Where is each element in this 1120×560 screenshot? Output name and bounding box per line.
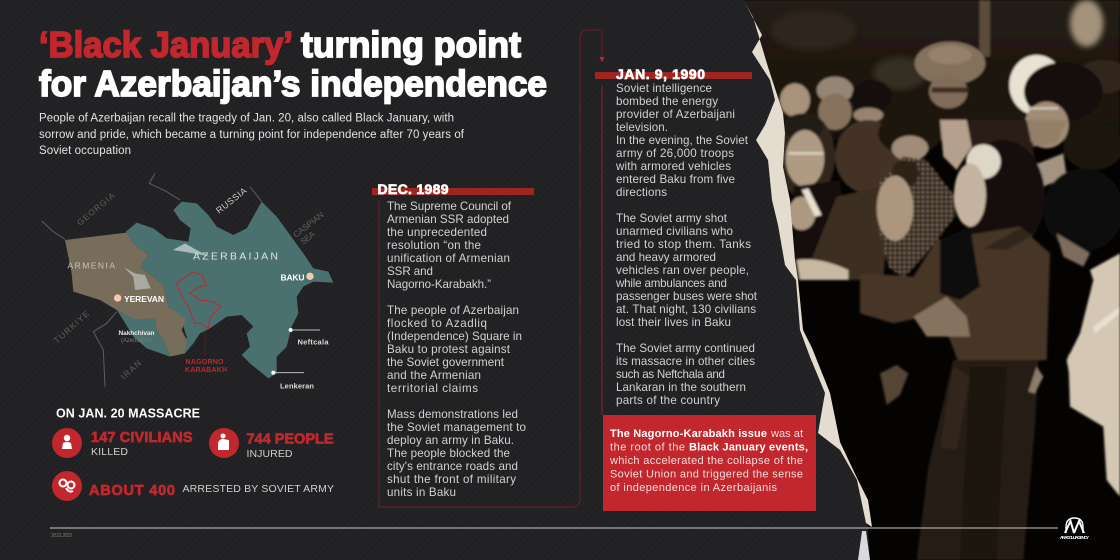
callout: Nagorno-Karabakh issue: of independence in Azerbaijanis bbox=[610, 482, 778, 494]
section: Jan. 9, 1990: unarmed civilians who bbox=[616, 225, 733, 238]
section: Jan. 9, 1990: provider of Azerbaijani bbox=[616, 108, 735, 121]
section: Jan. 9, 1990: vehicles ran over people, bbox=[616, 264, 749, 277]
section: Dec. 1989: units in Baku bbox=[387, 486, 456, 499]
section: Jan. 9, 1990: In the evening, the Soviet bbox=[616, 134, 749, 147]
section: Dec. 1989: and the Armenian bbox=[387, 369, 481, 382]
title: turning point bbox=[301, 24, 521, 65]
section: Dec. 1989: the Soviet management to bbox=[387, 421, 526, 434]
torn paper edge bbox=[745, 3, 872, 560]
section: Jan. 9, 1990: with armored vehicles bbox=[615, 160, 731, 173]
map of Azerbaijan and Armenia: BAKU bbox=[280, 272, 304, 282]
date: 20.01.2023 bbox=[51, 533, 72, 539]
stat: about 400 arrested bbox=[52, 471, 334, 501]
section: Dec. 1989: city's entrance roads and bbox=[387, 460, 518, 473]
map of Azerbaijan and Armenia: ARMENIA bbox=[68, 260, 115, 270]
title: for Azerbaijan’s independence bbox=[39, 63, 547, 104]
section: Jan. 9, 1990: JAN. 9, 1990 bbox=[616, 66, 705, 82]
map of Azerbaijan and Armenia: KARABAKH bbox=[185, 367, 227, 374]
section: Dec. 1989: DEC. 1989 bbox=[378, 181, 449, 197]
intro text: sorrow and pride, which became a turning point for independence after 70 years of bbox=[39, 129, 465, 141]
intro text: Soviet occupation bbox=[39, 145, 131, 157]
section: Dec. 1989: Nagorno-Karabakh.” bbox=[387, 278, 491, 291]
map of Azerbaijan and Armenia: (Azerbaijan) bbox=[121, 338, 152, 344]
section: Dec. 1989: flocked to Azadliq bbox=[387, 317, 487, 330]
section: Dec. 1989: unification of Armenian bbox=[387, 252, 510, 265]
section: Jan. 9, 1990: The Soviet army continued bbox=[616, 342, 755, 355]
callout: Nagorno-Karabakh issue: Black January events, bbox=[689, 442, 808, 454]
timeline connector arrow bbox=[379, 30, 604, 507]
section: Jan. 9, 1990: passenger buses were shot bbox=[616, 290, 758, 303]
map of Azerbaijan and Armenia: GEORGIA bbox=[75, 190, 117, 228]
section: Jan. 9, 1990: Soviet intelligence bbox=[616, 82, 712, 95]
photo: mourners in Baku bbox=[740, 0, 1120, 560]
section: Jan. 9, 1990: The Soviet army shot bbox=[616, 212, 728, 225]
section: Dec. 1989: (Independence) Square in bbox=[387, 330, 522, 343]
callout: Nagorno-Karabakh issue: Soviet Union and triggered the sense bbox=[610, 468, 803, 480]
section: Dec. 1989: The people blocked the bbox=[387, 447, 510, 460]
section: Dec. 1989: the Soviet government bbox=[387, 356, 505, 369]
section: Jan. 9, 1990: at. That night, 130 civilians bbox=[616, 303, 756, 316]
map of Azerbaijan and Armenia: SEA bbox=[298, 229, 317, 247]
logo: Anadolu Agency: ANADOLU AGENCY bbox=[1060, 535, 1089, 540]
map of Azerbaijan and Armenia: NAGORNO bbox=[186, 359, 224, 366]
section: Jan. 9, 1990: such as Neftchala and bbox=[616, 368, 725, 381]
section: Dec. 1989: Baku to protest against bbox=[387, 343, 511, 356]
section: Dec. 1989 bbox=[372, 181, 534, 499]
section: Jan. 9, 1990 bbox=[595, 66, 758, 407]
map of Azerbaijan and Armenia bbox=[42, 173, 333, 390]
section: Dec. 1989: The people of Azerbaijan bbox=[387, 304, 519, 317]
map of Azerbaijan and Armenia: RUSSIA bbox=[214, 186, 249, 216]
section: Dec. 1989: Mass demonstrations led bbox=[387, 408, 518, 421]
section: Jan. 9, 1990: directions bbox=[616, 186, 667, 199]
stat: 744 people injured: INJURED bbox=[246, 448, 293, 460]
stat: 147 civilians killed: KILLED bbox=[91, 446, 128, 458]
section: Dec. 1989: Armenian SSR adopted bbox=[387, 213, 509, 226]
stat: 744 people injured bbox=[209, 428, 334, 460]
stat: about 400 arrested: ABOUT 400 bbox=[89, 483, 175, 499]
icon: person bbox=[62, 435, 72, 449]
map of Azerbaijan and Armenia: Lenkeran bbox=[280, 382, 314, 390]
map of Azerbaijan and Armenia: TURKIYE bbox=[52, 308, 91, 345]
section: Dec. 1989: territorial claims bbox=[387, 382, 478, 395]
callout: Nagorno-Karabakh issue bbox=[603, 415, 816, 511]
section: Dec. 1989: SSR and bbox=[387, 265, 433, 278]
map of Azerbaijan and Armenia: Nakhchivan bbox=[118, 330, 155, 337]
map of Azerbaijan and Armenia: YEREVAN bbox=[124, 294, 164, 304]
map of Azerbaijan and Armenia: AZERBAIJAN bbox=[193, 250, 278, 262]
map of Azerbaijan and Armenia: IRAN bbox=[119, 358, 143, 381]
stat: 147 civilians killed: 147 CIVILIANS bbox=[91, 430, 193, 446]
section: Jan. 9, 1990: and heavy armored bbox=[616, 251, 716, 264]
stats heading: ON JAN. 20 MASSACRE bbox=[56, 406, 200, 420]
section: Jan. 9, 1990: Lankaran in the southern bbox=[616, 381, 746, 394]
section: Jan. 9, 1990: entered Baku from five bbox=[616, 173, 735, 186]
section: Jan. 9, 1990: lost their lives in Baku bbox=[616, 316, 731, 329]
title: ‘Black January’ bbox=[39, 24, 293, 65]
map of Azerbaijan and Armenia: CASPIAN bbox=[291, 210, 326, 240]
section: Jan. 9, 1990: while ambulances and bbox=[615, 277, 727, 290]
icon: injured person bbox=[218, 434, 229, 450]
logo: Anadolu Agency bbox=[1060, 518, 1089, 540]
callout: Nagorno-Karabakh issue: was at bbox=[770, 428, 803, 440]
footer rule bbox=[50, 527, 1058, 529]
intro text: People of Azerbaijan recall the tragedy of Jan. 20, also called Black January, with bbox=[39, 112, 454, 124]
section: Dec. 1989: shut the front of military bbox=[387, 473, 516, 486]
section: Dec. 1989: The Supreme Council of bbox=[387, 200, 512, 213]
callout: Nagorno-Karabakh issue: The Nagorno-Karabakh issue bbox=[610, 428, 767, 440]
stat: 744 people injured: 744 PEOPLE bbox=[246, 432, 334, 448]
section: Dec. 1989: deploy an army in Baku. bbox=[387, 434, 514, 447]
icon: handcuffs bbox=[60, 480, 74, 492]
callout: Nagorno-Karabakh issue: the root of the bbox=[610, 442, 685, 454]
intro text bbox=[39, 112, 465, 157]
section: Jan. 9, 1990: bombed the energy bbox=[616, 95, 718, 108]
callout: Nagorno-Karabakh issue: which accelerated the collapse of the bbox=[609, 455, 803, 467]
section: Dec. 1989: the unprecedented bbox=[387, 226, 487, 239]
section: Jan. 9, 1990: its massacre in other cities bbox=[616, 355, 755, 368]
title bbox=[39, 24, 547, 104]
map of Azerbaijan and Armenia: Neftcala bbox=[298, 338, 329, 346]
section: Jan. 9, 1990: tried to stop them. Tanks bbox=[616, 238, 751, 251]
stat: 147 civilians killed bbox=[52, 428, 193, 458]
section: Dec. 1989: resolution “on the bbox=[387, 239, 481, 252]
stat: about 400 arrested: ARRESTED BY SOVIET ARMY bbox=[182, 483, 334, 495]
section: Jan. 9, 1990: parts of the country bbox=[616, 394, 720, 407]
section: Jan. 9, 1990: television. bbox=[616, 121, 668, 134]
section: Jan. 9, 1990: army of 26,000 troops bbox=[616, 147, 734, 160]
